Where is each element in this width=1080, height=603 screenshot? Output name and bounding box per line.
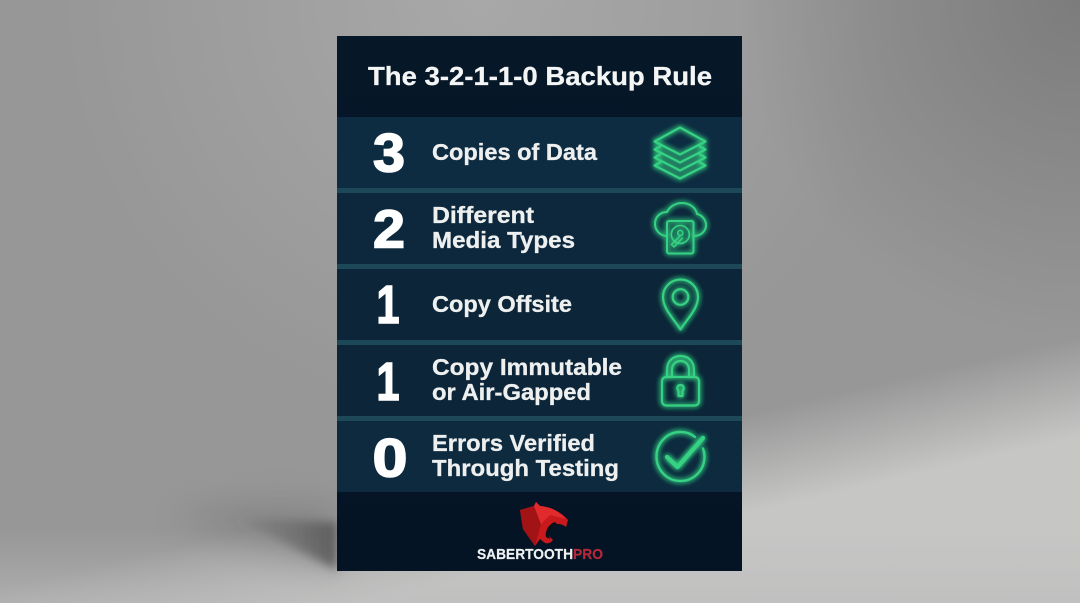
icon: red panther head (520, 502, 568, 546)
label: copies of data: Copies of Data (432, 139, 597, 165)
label: errors verified through testing: Through Testing (432, 455, 619, 481)
logo wordmark: SABERTOOTH (477, 546, 573, 563)
label: copy immutable or air-gapped: or Air-Gapped (432, 379, 591, 405)
number 0: 0 (372, 428, 408, 488)
label: errors verified through testing (432, 430, 619, 481)
icon: location pin (663, 280, 698, 330)
number 2: 2 (373, 200, 405, 260)
row 1: 3 copies of data (337, 117, 742, 193)
label: different media types: Different (432, 202, 534, 228)
row 5: 0 errors verified through testing (337, 421, 742, 492)
logo wordmark: PRO (573, 546, 603, 563)
logo: sabertooth pro (477, 502, 603, 563)
number 1: 1 (376, 275, 400, 335)
title: The 3-2-1-1-0 Backup Rule (368, 61, 712, 91)
poster shadow (170, 501, 337, 570)
row 3: 1 copy offsite (337, 269, 742, 345)
poster (337, 36, 742, 571)
icon: stacked layers (654, 128, 706, 178)
label: copy immutable or air-gapped: Copy Immutable (432, 354, 622, 380)
number 3: 3 (373, 124, 405, 184)
row 4: 1 copy immutable or air-gapped (337, 345, 742, 421)
label: copy immutable or air-gapped (432, 354, 622, 405)
row 2: 2 different media types (337, 193, 742, 269)
label: copy offsite: Copy Offsite (432, 291, 572, 317)
label: errors verified through testing: Errors Verified (432, 430, 595, 456)
number 1: 1 (376, 352, 400, 412)
icon: cloud with hard drive (655, 203, 706, 254)
icon: check circle (656, 432, 704, 481)
icon: padlock (662, 356, 699, 406)
label: different media types (432, 202, 575, 253)
label: different media types: Media Types (432, 227, 575, 253)
